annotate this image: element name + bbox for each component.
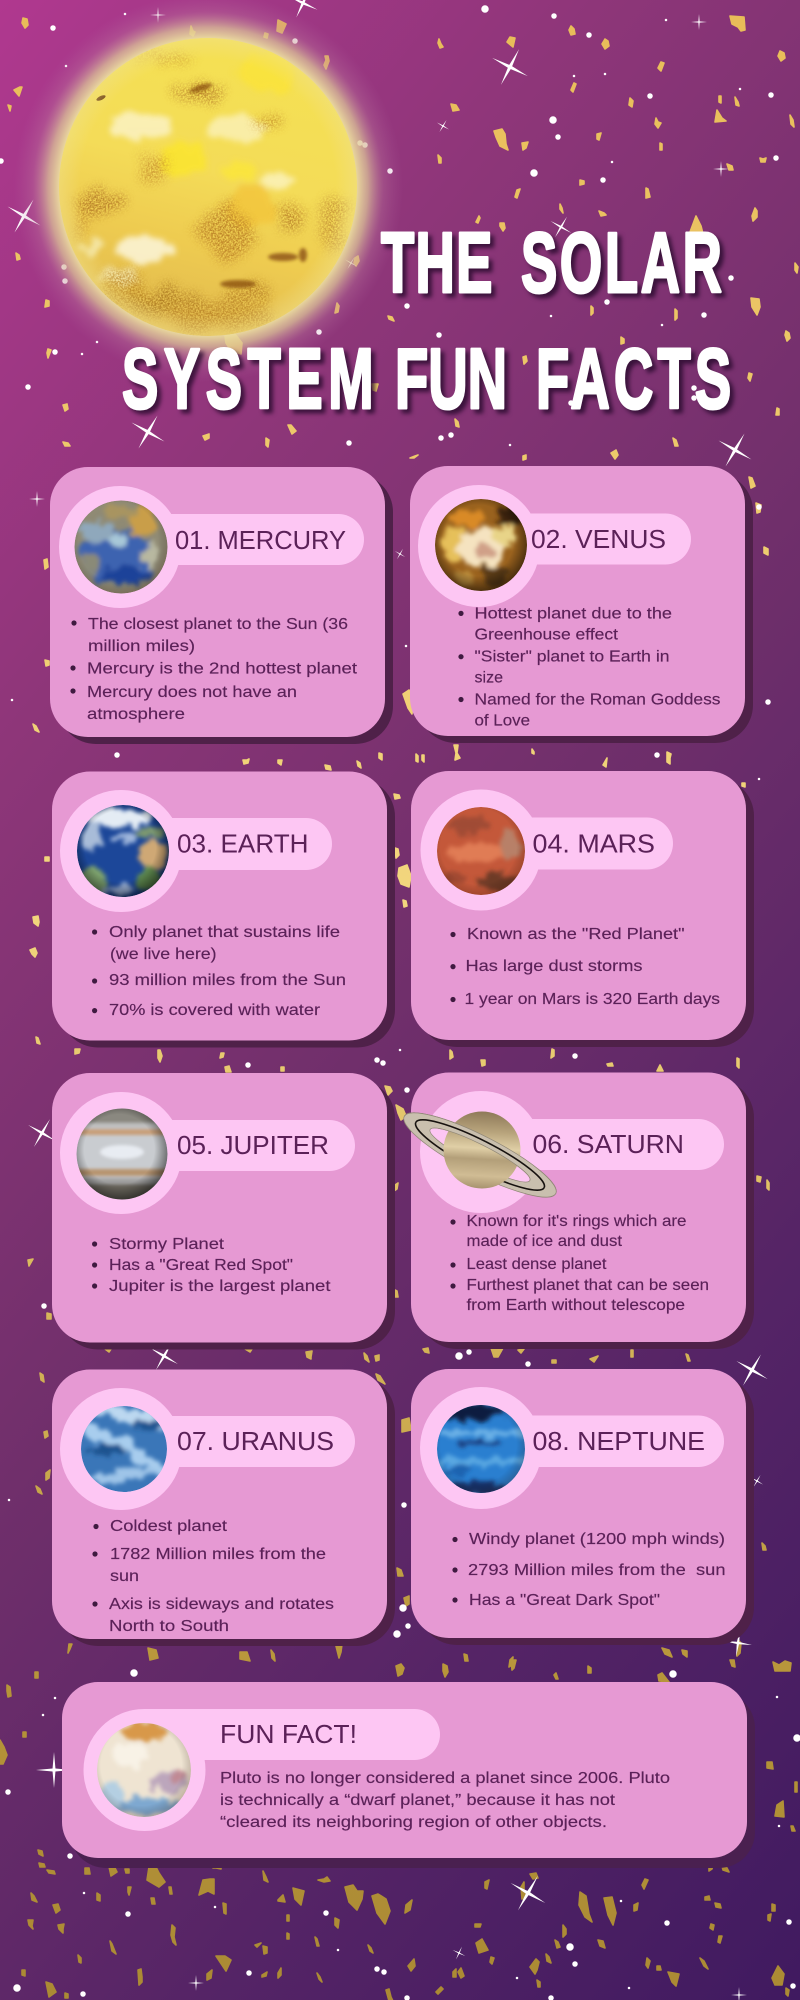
- icon: mercury planet: [74, 500, 168, 594]
- facts: uranus: Axis is sideways and rotates: [109, 1596, 334, 1613]
- title: THE: [381, 216, 492, 311]
- facts: saturn: [450, 1213, 709, 1314]
- facts: earth: Only planet that sustains life: [109, 924, 340, 941]
- facts: neptune: 2793 Million miles from the sun: [468, 1562, 726, 1579]
- heading: mars: 04. MARS: [532, 828, 655, 858]
- gold confetti: [8, 16, 798, 460]
- icon: pluto planet: [97, 1722, 191, 1817]
- gold confetti, bottom: [0, 1660, 797, 2000]
- facts: uranus: sun: [110, 1568, 139, 1585]
- facts: mercury: [70, 616, 358, 723]
- heading: fun fact: FUN FACT!: [220, 1719, 357, 1749]
- icon: venus planet: [435, 499, 527, 591]
- facts: uranus: North to South: [109, 1618, 229, 1635]
- panel: mars: [411, 771, 754, 1047]
- sun: [13, 0, 403, 382]
- text: pluto fact: [220, 1770, 670, 1831]
- facts: neptune: Has a "Great Dark Spot": [469, 1592, 660, 1609]
- facts: venus: of Love: [474, 712, 530, 730]
- facts: earth: 70% is covered with water: [109, 1002, 321, 1019]
- facts: venus: Greenhouse effect: [474, 626, 619, 644]
- text: pluto fact: Pluto is no longer considered a planet since 2006. Pluto: [220, 1770, 670, 1787]
- facts: earth: 93 million miles from the Sun: [109, 972, 346, 989]
- facts: mars: Has large dust storms: [466, 958, 642, 975]
- facts: jupiter: Jupiter is the largest planet: [109, 1278, 331, 1295]
- facts: mercury: atmosphere: [87, 706, 185, 723]
- panel: mercury: [50, 467, 393, 744]
- panel: uranus: [52, 1370, 395, 1646]
- facts: venus: size: [474, 670, 503, 686]
- facts: saturn: Known for it's rings which are: [466, 1213, 687, 1230]
- title: SOLAR: [521, 216, 722, 311]
- icon: uranus planet: [80, 1402, 170, 1492]
- heading: mercury: 01. MERCURY: [175, 525, 346, 555]
- title: [122, 216, 731, 427]
- heading: earth: 03. EARTH: [177, 828, 308, 858]
- facts: uranus: [92, 1518, 334, 1635]
- facts: earth: (we live here): [110, 946, 216, 963]
- facts: saturn: made of ice and dust: [466, 1233, 623, 1250]
- facts: saturn: from Earth without telescope: [466, 1297, 685, 1314]
- panel: saturn: [396, 1072, 754, 1349]
- title: FACTS: [536, 332, 731, 427]
- facts: mars: [450, 926, 720, 1008]
- facts: mercury: million miles): [88, 638, 195, 655]
- panel: earth: [52, 772, 395, 1048]
- facts: earth: [92, 924, 346, 1019]
- text: pluto fact: “cleared its neighboring region of other objects.: [220, 1814, 607, 1831]
- facts: uranus: 1782 Million miles from the: [110, 1546, 326, 1563]
- panel: jupiter: [52, 1073, 395, 1350]
- heading: venus: 02. VENUS: [531, 524, 666, 554]
- panel: venus: [410, 466, 753, 743]
- icon: saturn planet: [403, 1112, 557, 1198]
- title: FUN: [395, 332, 507, 427]
- facts: uranus: Coldest planet: [110, 1518, 228, 1535]
- facts: mars: 1 year on Mars is 320 Earth days: [464, 991, 720, 1008]
- facts: jupiter: Stormy Planet: [109, 1236, 225, 1253]
- facts: saturn: Least dense planet: [466, 1256, 607, 1273]
- facts: neptune: Windy planet (1200 mph winds): [469, 1531, 725, 1548]
- facts: venus: [458, 606, 720, 730]
- facts: venus: Named for the Roman Goddess: [474, 692, 720, 708]
- panel: neptune: [411, 1369, 754, 1645]
- heading: uranus: 07. URANUS: [177, 1426, 334, 1456]
- icon: mars planet: [437, 807, 525, 895]
- facts: jupiter: Has a "Great Red Spot": [109, 1257, 293, 1274]
- text: pluto fact: is technically a “dwarf planet,” because it has not: [220, 1792, 616, 1809]
- facts: venus: Hottest planet due to the: [474, 606, 672, 622]
- facts: mars: Known as the "Red Planet": [467, 926, 684, 943]
- facts: saturn: Furthest planet that can be seen: [466, 1277, 709, 1294]
- facts: mercury: Mercury is the 2nd hottest planet: [87, 660, 358, 678]
- facts: venus: "Sister" planet to Earth in: [474, 648, 670, 666]
- facts: mercury: Mercury does not have an: [87, 684, 297, 701]
- facts: neptune: [452, 1531, 726, 1609]
- icon: earth planet: [77, 805, 169, 897]
- heading: saturn: 06. SATURN: [532, 1129, 684, 1159]
- title: SYSTEM: [122, 332, 374, 427]
- facts: mercury: The closest planet to the Sun (36: [88, 616, 348, 633]
- heading: neptune: 08. NEPTUNE: [532, 1426, 705, 1456]
- icon: jupiter planet: [76, 1108, 168, 1200]
- gold confetti, middle: [28, 477, 769, 1667]
- facts: jupiter: [92, 1236, 331, 1295]
- panel: fun fact: [62, 1682, 755, 1868]
- heading: jupiter: 05. JUPITER: [177, 1130, 329, 1160]
- icon: neptune planet: [436, 1403, 525, 1493]
